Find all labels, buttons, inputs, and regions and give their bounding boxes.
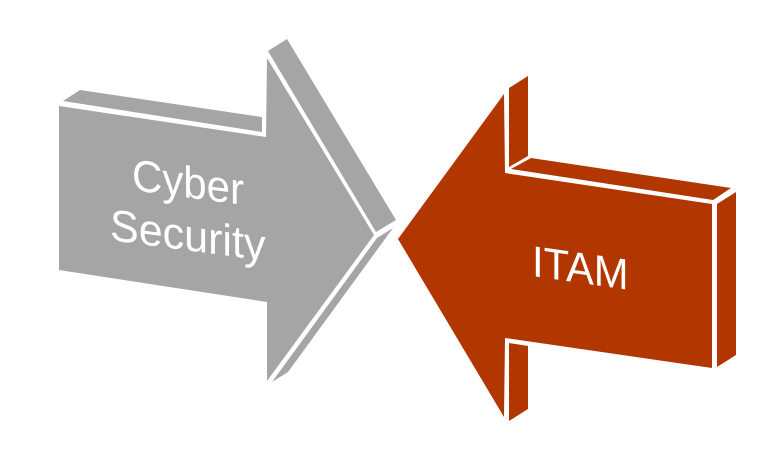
lower bevel of arrow head	[272, 228, 393, 382]
arrow: ITAM (rust red, pointing left)	[398, 76, 736, 421]
right end bevel of shaft	[717, 192, 736, 367]
label: ITAM: ITAM	[532, 237, 629, 300]
lower bevel of arrow head	[509, 343, 528, 421]
arrow face	[59, 58, 374, 381]
arrow: Cyber Security (grey, pointing right)	[59, 39, 396, 382]
upper bevel of arrow head	[509, 76, 528, 167]
top bevel of shaft	[63, 90, 262, 132]
arrow face	[398, 94, 712, 417]
label: Cyber: Cyber	[132, 151, 244, 215]
top bevel of shaft	[511, 158, 731, 200]
label: Security: Security	[110, 201, 265, 271]
upper bevel of arrow head	[268, 39, 396, 232]
